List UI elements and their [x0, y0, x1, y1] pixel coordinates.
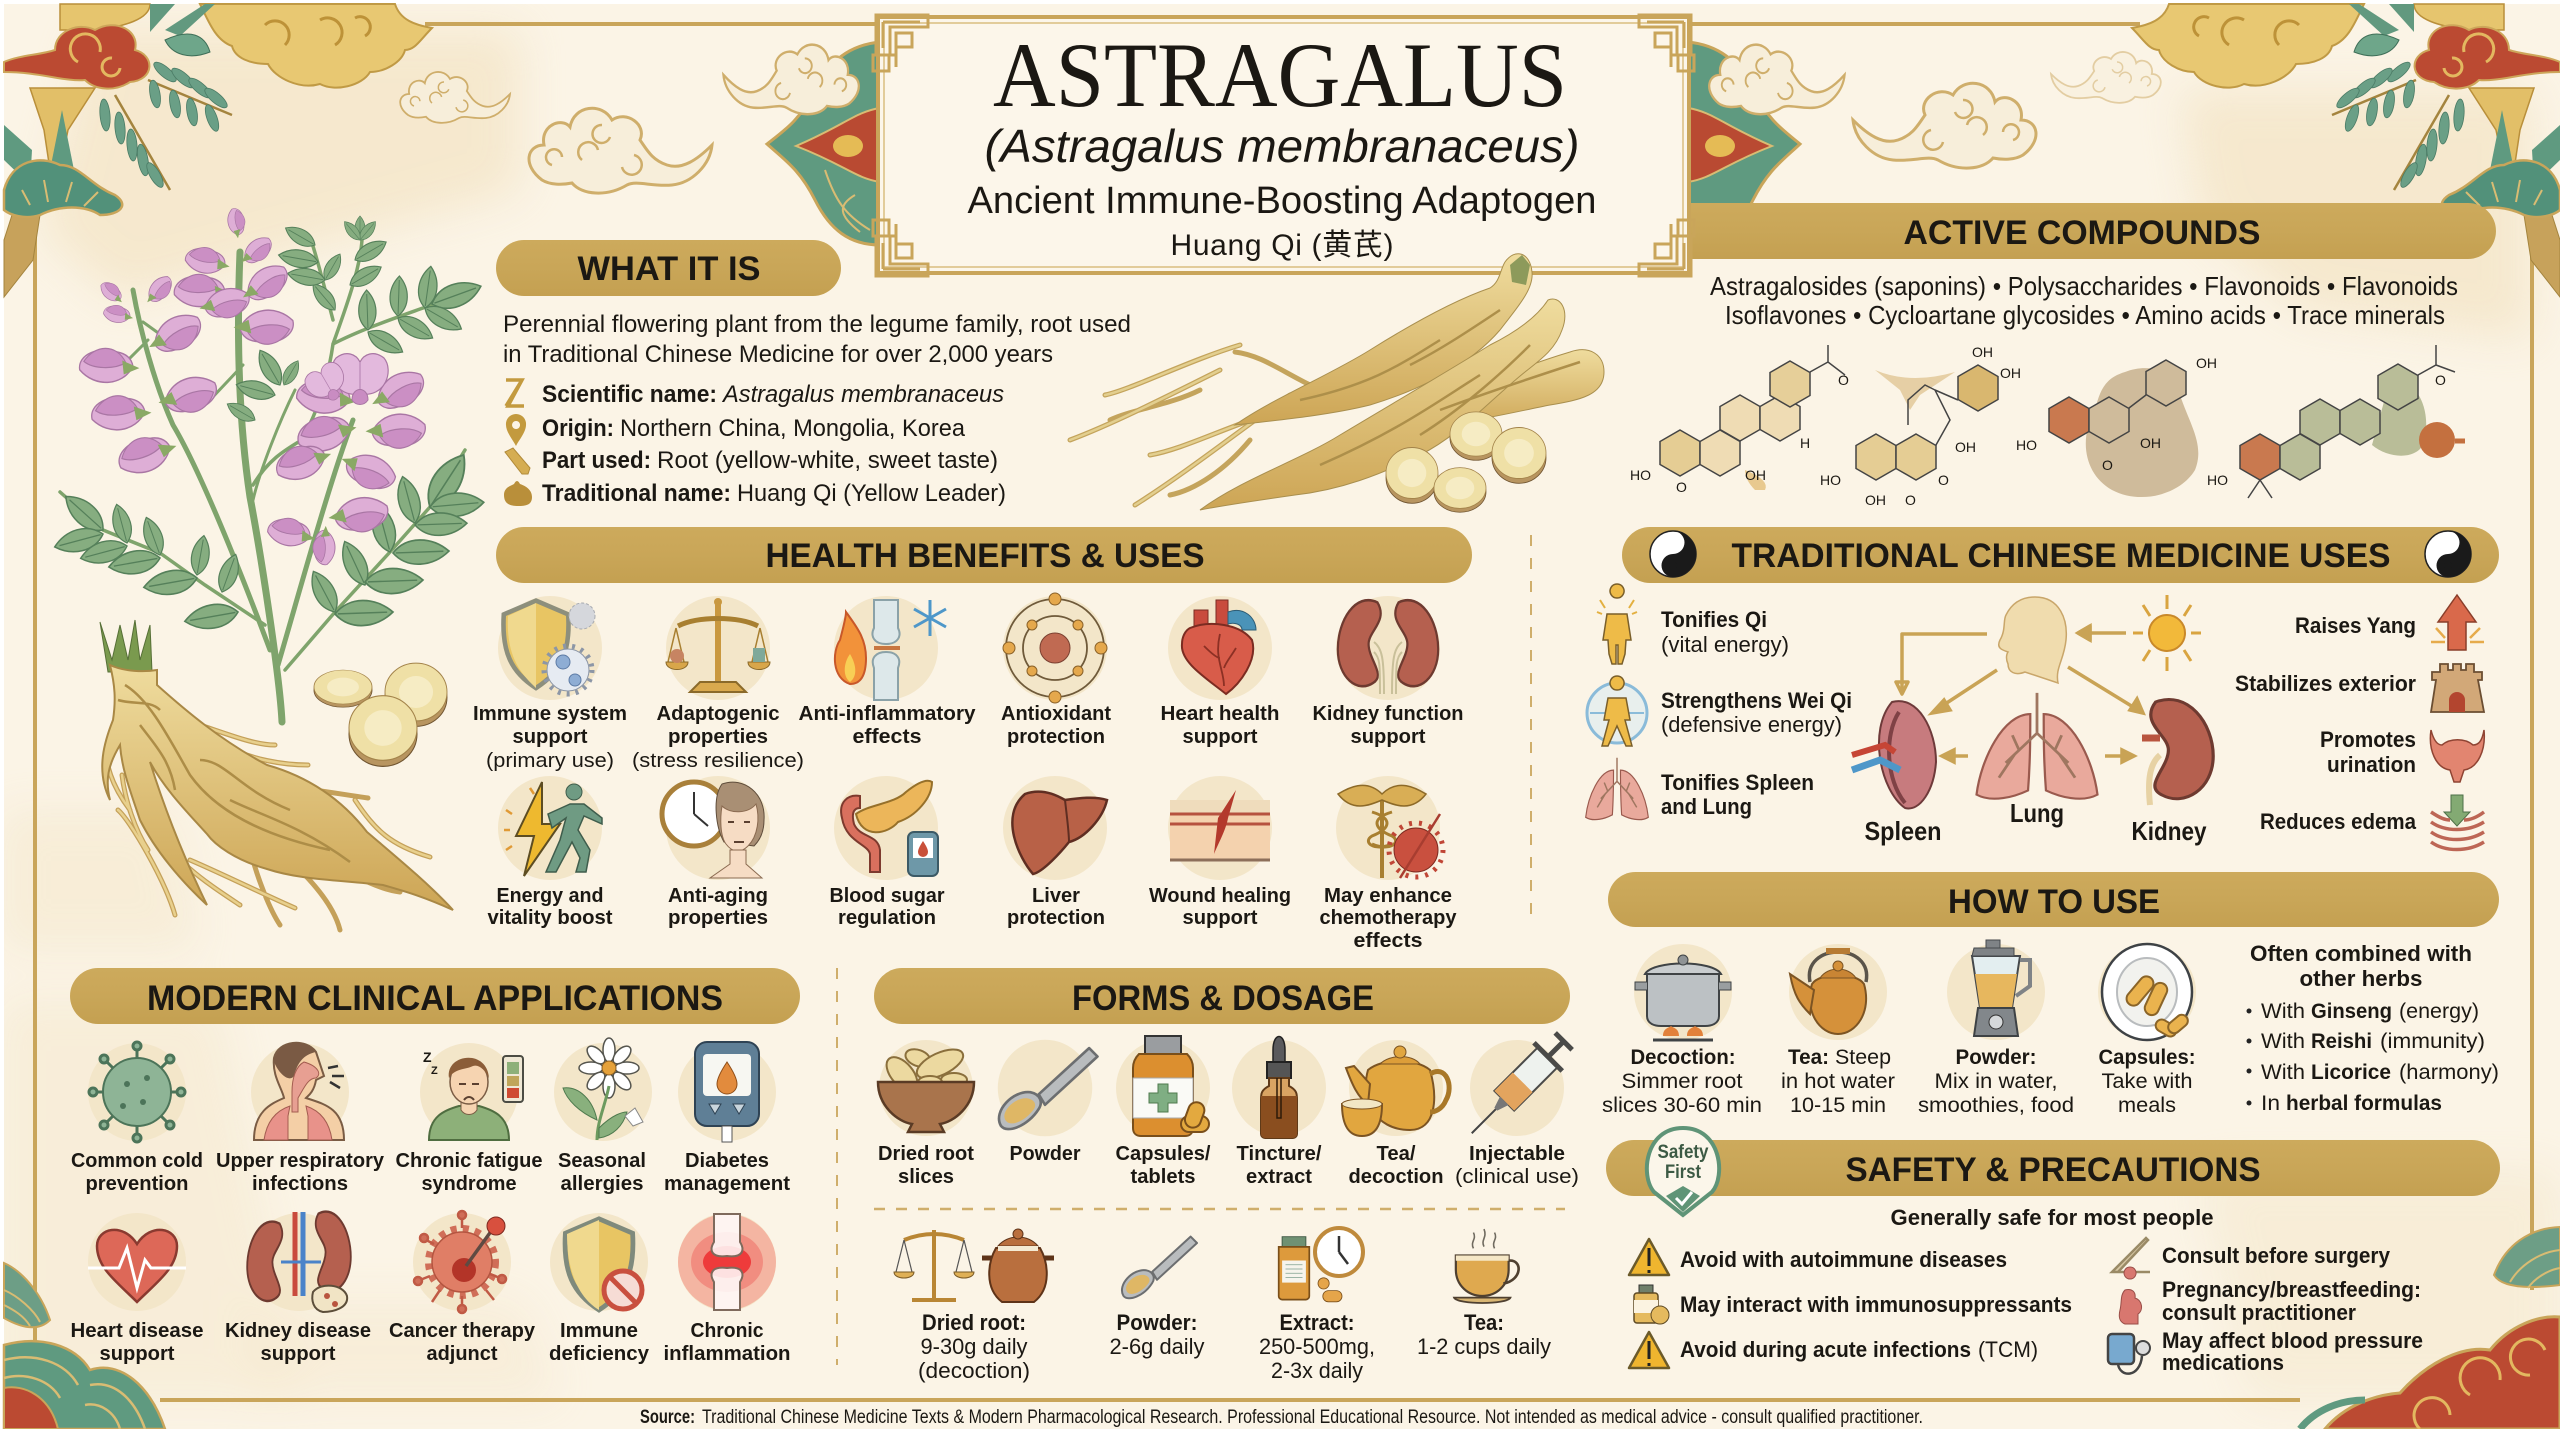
badge: safety first: First [1665, 1162, 1702, 1183]
tcm right: promotes urination: Promotes [2320, 727, 2416, 752]
clinical labels row 2: inflammation [664, 1343, 790, 1365]
form: injectable [1458, 1027, 1578, 1147]
upper right leaf [224, 216, 485, 426]
tcm left: wei qi: (defensive energy) [1661, 712, 1842, 737]
clinical labels row 2: Cancer therapy [389, 1320, 536, 1342]
heading: how to use: HOW TO USE [1948, 883, 2160, 921]
clinical labels row 2 [70, 1320, 790, 1365]
pill heading: active compounds [1690, 203, 2496, 259]
molecule 1: OH [1745, 467, 1766, 483]
how: powder: smoothies, food [1918, 1094, 2074, 1117]
clinical: cancer [413, 1211, 511, 1313]
section divider [1530, 535, 1532, 920]
heading: health benefits: HEALTH BENEFITS & USES [766, 537, 1204, 575]
dose: tea: 1-2 cups daily [1417, 1334, 1551, 1359]
form: tea [1342, 1040, 1449, 1136]
source line: Traditional Chinese Medicine Texts & Modern Pharmacological Research. Professional Educational Resource. Not intended as medical advice - consult qualified practitioner. [702, 1407, 1923, 1428]
how: decoction: slices 30-60 min [1602, 1094, 1762, 1117]
corner ornament: top right [2132, 4, 2560, 297]
heading: what it is [496, 240, 841, 296]
benefit: blood sugar [834, 776, 938, 880]
molecule 4: HO [2207, 472, 2228, 488]
how: combined herbs: With [2261, 1030, 2305, 1053]
what it is description [503, 311, 1131, 368]
caution: immunosuppressants [1634, 1285, 2072, 1324]
benefit labels row 2: vitality boost [488, 907, 613, 929]
tcm left: tonifies qi [1597, 584, 1789, 664]
how: powder: Powder: [1956, 1046, 2036, 1069]
benefit labels row 2: Energy and [496, 885, 604, 907]
caution: autoimmune [1629, 1239, 2007, 1275]
molecule 1: O [1676, 479, 1687, 495]
how: combined herbs: (energy) [2399, 1000, 2479, 1023]
clinical labels row 2: deficiency [549, 1343, 650, 1365]
how: combined herbs: (harmony) [2399, 1061, 2499, 1084]
section divider [836, 968, 838, 1365]
tcm right: raises yang [2295, 595, 2484, 650]
how: combined herbs: Licorice [2311, 1061, 2391, 1084]
organ labels [1864, 798, 2207, 846]
benefit: anti-inflammatory [834, 596, 946, 700]
lungs [1977, 693, 2097, 799]
title: ASTRAGALUS [993, 24, 1567, 126]
tcm right: raises yang: Raises Yang [2295, 613, 2416, 638]
how: combined herbs: Often combined with [2250, 941, 2472, 966]
compounds text: Astragalosides (saponins) • Polysaccharides • Flavonoids • Flavonoids [1710, 271, 2458, 301]
form: dried root [878, 1040, 974, 1136]
molecule 2: OH [1865, 492, 1886, 508]
upper root [1235, 254, 1532, 425]
how: powder [1918, 940, 2074, 1117]
medallion: right of title [1688, 42, 1845, 245]
form labels: tablets [1130, 1166, 1196, 1188]
how: powder: Mix in water, [1934, 1070, 2058, 1093]
caution: pregnancy: consult practitioner [2162, 1300, 2356, 1325]
center root illustration [1070, 254, 1604, 510]
dose: powder [1110, 1237, 1204, 1359]
caution: blood pressure [2108, 1328, 2423, 1375]
heading: what it is: WHAT IT IS [578, 250, 760, 288]
center root slices [1386, 412, 1546, 512]
caution: blood pressure: medications [2162, 1350, 2284, 1375]
title panel [873, 15, 1694, 276]
benefit labels row 2: May enhance [1324, 885, 1452, 907]
benefit: adaptogenic [666, 596, 770, 700]
tcm right: stabilizes exterior: Stabilizes exterior [2235, 671, 2416, 696]
how: tea [1781, 944, 1895, 1117]
tcm left: wei qi [1587, 676, 1852, 746]
heading: tcm [1622, 527, 2499, 583]
form: tincture [1232, 1036, 1326, 1138]
caution: acute infections [1629, 1332, 2038, 1368]
tcm right: stabilizes exterior [2235, 664, 2484, 712]
benefit: anti-aging [662, 776, 770, 880]
form labels: extract [1246, 1166, 1312, 1188]
clinical labels row 2: Heart disease [70, 1320, 204, 1342]
fact: part used: Root (yellow-white, sweet taste) [657, 447, 998, 474]
benefit: chemotherapy [1336, 776, 1443, 880]
decorative clouds [400, 52, 2161, 193]
how: tea: in hot water [1781, 1070, 1895, 1093]
benefit: kidney [1336, 596, 1440, 700]
benefit labels row 1: Anti-inflammatory [798, 703, 976, 725]
dose: extract: 250-500mg, [1259, 1334, 1375, 1359]
fact: part used: Part used: [542, 447, 651, 474]
corner ornament: bottom right [2300, 1227, 2560, 1429]
benefit labels row 1: protection [1007, 726, 1105, 748]
benefit labels row 1: support [512, 726, 588, 748]
tcm diagram [1852, 595, 2213, 846]
dose: dried root [894, 1229, 1054, 1383]
corner ornament: bottom left [4, 1263, 165, 1429]
how: combined herbs: In [2261, 1092, 2280, 1115]
flowers [77, 209, 430, 566]
molecule 1 [1630, 345, 1849, 495]
form labels: Powder [1010, 1143, 1081, 1165]
how: combined herbs [2246, 941, 2499, 1115]
molecule 1: H [1800, 435, 1810, 451]
caution: immunosuppressants: May interact with immunosuppressants [1680, 1292, 2072, 1317]
clinical labels row 2: support [100, 1343, 175, 1365]
organ labels: Lung [2010, 798, 2064, 828]
tcm left: spleen and lung: Tonifies Spleen [1661, 770, 1814, 795]
left root slices [314, 663, 447, 766]
caution: pregnancy [2119, 1267, 2421, 1325]
medallion: left of title [723, 42, 880, 245]
benefit labels row 1: Immune system [473, 703, 627, 725]
what it is description: in Traditional Chinese Medicine for over 2,000 years [503, 341, 1053, 368]
corner ornament: top left [4, 4, 432, 297]
left root illustration [100, 620, 453, 930]
molecule 1: O [1838, 372, 1849, 388]
tcm left: tonifies qi: Tonifies Qi [1661, 607, 1767, 632]
subtitle: Ancient Immune-Boosting Adaptogen [968, 180, 1596, 222]
organ labels: Kidney [2132, 816, 2207, 846]
dose: extract: Extract: [1280, 1310, 1354, 1335]
how: capsules: Take with [2102, 1070, 2192, 1093]
benefit labels row 2: regulation [838, 907, 936, 929]
icon: herb [506, 380, 524, 406]
dose: dried root: 9-30g daily [920, 1334, 1028, 1359]
lower left leaf [52, 489, 244, 633]
caution: surgery [2112, 1238, 2391, 1272]
benefit labels row 1: (primary use) [486, 750, 614, 772]
fact: traditional name: Traditional name: [542, 480, 731, 507]
pill heading: active compounds: ACTIVE COMPOUNDS [1904, 214, 2260, 252]
clinical: allergies [554, 1038, 652, 1141]
dose: dried root: (decoction) [918, 1358, 1030, 1383]
heading: forms and dosage: FORMS & DOSAGE [1072, 979, 1374, 1018]
clinical labels row 1: infections [252, 1173, 348, 1195]
how: combined herbs: other herbs [2300, 966, 2422, 991]
benefit labels row 2: support [1182, 907, 1258, 929]
benefit: antioxidant [1003, 593, 1107, 703]
clinical labels row 1: allergies [560, 1173, 644, 1195]
clinical labels row 2: Kidney disease [225, 1320, 371, 1342]
clinical labels row 2: adjunct [426, 1343, 498, 1365]
how: decoction: Decoction: [1630, 1046, 1736, 1069]
benefit: heart [1168, 596, 1272, 700]
latin name: (Astragalus membranaceus) [984, 120, 1580, 172]
source line: Source: [640, 1407, 695, 1428]
clinical: fatigue: Z [431, 1065, 438, 1077]
tcm right: promotes urination [2320, 727, 2484, 782]
benefit labels row 2: properties [668, 907, 768, 929]
form labels: Injectable [1469, 1143, 1565, 1165]
benefit labels row 2: chemotherapy [1320, 907, 1457, 929]
caution: acute infections: Avoid during acute infections [1680, 1337, 1971, 1362]
clinical: immune deficiency [550, 1213, 648, 1311]
benefit labels row 1 [473, 703, 1464, 772]
benefit labels row 2: Blood sugar [830, 885, 945, 907]
clinical: kidney disease [247, 1212, 351, 1312]
plant illustration [52, 209, 485, 722]
chinese name: Huang Qi (黄芪) [1170, 229, 1394, 262]
heading: modern clinical: MODERN CLINICAL APPLICATIONS [147, 979, 723, 1018]
how: tea: Tea: [1788, 1046, 1829, 1069]
fact: origin: Northern China, Mongolia, Korea [620, 415, 966, 442]
dosage divider [874, 1208, 1565, 1210]
benefit labels row 2: protection [1007, 907, 1105, 929]
benefit labels row 1: effects [852, 726, 922, 748]
clinical labels row 1: prevention [86, 1173, 188, 1195]
clinical labels row 2: Immune [560, 1320, 638, 1342]
form labels: slices [898, 1166, 954, 1188]
heading: tcm: TRADITIONAL CHINESE MEDICINE USES [1732, 537, 2390, 575]
benefit labels row 1: Adaptogenic [656, 703, 780, 725]
form labels: Dried root [878, 1143, 974, 1165]
how: tea: 10-15 min [1790, 1094, 1886, 1117]
safety summary: Generally safe for most people [1890, 1205, 2214, 1230]
form labels: Tincture/ [1236, 1143, 1322, 1165]
how: decoction: Simmer root [1622, 1070, 1743, 1093]
facts list [504, 380, 1006, 507]
badge: safety first: Safety [1658, 1142, 1709, 1163]
clinical labels row 1: Seasonal [558, 1150, 646, 1172]
clinical labels row 2: support [260, 1343, 336, 1365]
benefit labels row 2: Liver [1032, 885, 1080, 907]
molecule 4 [2207, 345, 2465, 498]
horizontal root [1380, 350, 1604, 430]
heading: modern clinical [70, 968, 800, 1024]
clinical labels row 1: Upper respiratory [216, 1150, 385, 1172]
benefit labels row 1: (stress resilience) [632, 750, 804, 772]
tcm left: spleen and lung: and Lung [1661, 794, 1752, 819]
clinical labels row 1: Chronic fatigue [396, 1150, 542, 1172]
molecule 2: OH [2000, 365, 2021, 381]
clinical: cold [88, 1042, 186, 1142]
benefit: liver [1003, 776, 1107, 880]
heading: safety: SAFETY & PRECAUTIONS [1846, 1151, 2260, 1189]
clinical labels row 1: syndrome [422, 1173, 516, 1195]
compounds text: Isoflavones • Cycloartane glycosides • Amino acids • Trace minerals [1725, 300, 2445, 330]
kidney [2142, 699, 2213, 805]
arrows [1896, 626, 2143, 762]
how: combined herbs: (immunity) [2380, 1030, 2485, 1053]
clinical: inflammation [678, 1213, 776, 1311]
clinical labels row 1 [71, 1150, 790, 1195]
clinical labels row 2: Chronic [690, 1320, 764, 1342]
form labels: (clinical use) [1455, 1166, 1579, 1188]
caution: surgery: Consult before surgery [2162, 1243, 2391, 1268]
heading: how to use [1608, 872, 2499, 927]
dose: powder: 2-6g daily [1110, 1334, 1204, 1359]
clinical labels row 1: Diabetes [685, 1150, 769, 1172]
benefit labels row 2: effects [1354, 930, 1422, 952]
molecule 3 [2016, 355, 2217, 497]
heading: forms and dosage [874, 968, 1570, 1024]
molecule 2 [1820, 344, 2021, 508]
molecule 4: O [2435, 372, 2446, 388]
tcm left: spleen and lung [1586, 758, 1814, 820]
clinical labels row 1: Common cold [71, 1150, 203, 1172]
benefit labels row 1: Heart health [1160, 703, 1280, 725]
form labels: decoction [1348, 1166, 1444, 1188]
dose: extract: 2-3x daily [1271, 1358, 1363, 1383]
fact: scientific name: Scientific name: [542, 381, 717, 408]
form labels: Tea/ [1376, 1143, 1416, 1165]
benefit labels row 2: Wound healing [1149, 885, 1291, 907]
how: combined herbs: Reishi [2311, 1030, 2372, 1053]
tcm right: reduces edema: Reduces edema [2260, 809, 2417, 834]
spleen [1852, 701, 1936, 808]
benefit: energy [498, 776, 602, 880]
benefit labels row 2: Anti-aging [668, 885, 768, 907]
benefit labels row 1: properties [668, 726, 768, 748]
how: combined herbs: herbal formulas [2286, 1092, 2442, 1115]
form labels: Capsules/ [1116, 1143, 1211, 1165]
fact: origin: Origin: [542, 415, 614, 442]
badge: safety first [1647, 1128, 1719, 1215]
molecule 2: HO [1820, 472, 1841, 488]
clinical: fatigue [420, 1043, 523, 1141]
benefit: immune [498, 596, 602, 700]
clinical: fatigue: Z [423, 1049, 432, 1065]
tcm right: promotes urination: urination [2327, 752, 2416, 777]
fact: traditional name [542, 480, 1006, 507]
form: capsules [1116, 1036, 1210, 1136]
benefit labels row 2 [488, 885, 1457, 952]
molecule 2: OH [1972, 344, 1993, 360]
clinical: respiratory [251, 1043, 349, 1141]
molecule 3: HO [2016, 437, 2037, 453]
heading: safety [1606, 1140, 2500, 1196]
dose: tea: Tea: [1464, 1310, 1504, 1335]
heading: health benefits [496, 527, 1472, 583]
dose: tea [1417, 1229, 1551, 1359]
benefit labels row 1: Kidney function [1312, 703, 1464, 725]
icon: yin yang right [2425, 531, 2471, 577]
how: combined herbs: Ginseng [2311, 1000, 2392, 1023]
how: capsules: meals [2118, 1094, 2176, 1117]
form: powder [998, 1040, 1098, 1136]
molecule 2: OH [1955, 439, 1976, 455]
how: combined herbs: With [2261, 1061, 2305, 1084]
benefit labels row 1: Antioxidant [1001, 703, 1111, 725]
tcm left: wei qi: Strengthens Wei Qi [1661, 688, 1852, 713]
molecule 1: HO [1630, 467, 1651, 483]
molecule 2: O [1938, 472, 1949, 488]
tcm left: tonifies qi: (vital energy) [1661, 632, 1789, 657]
lower root [1200, 299, 1565, 510]
fact: traditional name: Huang Qi (Yellow Leader) [737, 480, 1006, 507]
molecule 3: OH [2140, 435, 2161, 451]
what it is description: Perennial flowering plant from the legume family, root used [503, 311, 1131, 338]
benefit labels row 1: support [1350, 726, 1426, 748]
molecule 3: O [2102, 457, 2113, 473]
benefit: wound [1168, 776, 1272, 880]
icon: yin yang left [1650, 531, 1696, 577]
head [1999, 597, 2066, 683]
icon: cloud seal [504, 481, 532, 506]
dose: extract [1259, 1228, 1375, 1383]
icon: pin [506, 414, 526, 446]
caution: pregnancy: Pregnancy/breastfeeding: [2162, 1277, 2421, 1302]
caution: autoimmune: Avoid with autoimmune diseases [1680, 1247, 2007, 1272]
form labels [878, 1143, 1579, 1188]
organ labels: Spleen [1864, 816, 1942, 846]
caution: blood pressure: May affect blood pressure [2162, 1328, 2423, 1353]
molecule 2: O [1905, 492, 1916, 508]
compounds text [1710, 271, 2458, 330]
benefit labels row 1: support [1182, 726, 1258, 748]
clinical: diabetes [678, 1042, 776, 1142]
clinical: heart [88, 1213, 186, 1311]
how: capsules: Capsules: [2098, 1046, 2196, 1069]
icon: root [505, 448, 530, 474]
tcm right: reduces edema [2260, 795, 2484, 850]
dose: powder: Powder: [1116, 1310, 1198, 1335]
lower right leaf [305, 448, 485, 627]
sun [2133, 595, 2201, 671]
fact: scientific name: Astragalus membranaceus [721, 381, 1004, 408]
how: tea: Steep [1835, 1046, 1891, 1069]
how: capsules [2098, 944, 2196, 1117]
how: combined herbs: With [2261, 1000, 2305, 1023]
how: decoction [1602, 944, 1762, 1117]
clinical labels row 1: management [664, 1173, 790, 1195]
molecule 3: OH [2196, 355, 2217, 371]
dose: dried root: Dried root: [922, 1310, 1026, 1335]
caution: acute infections: (TCM) [1978, 1337, 2038, 1362]
fact: scientific name [542, 381, 1004, 408]
